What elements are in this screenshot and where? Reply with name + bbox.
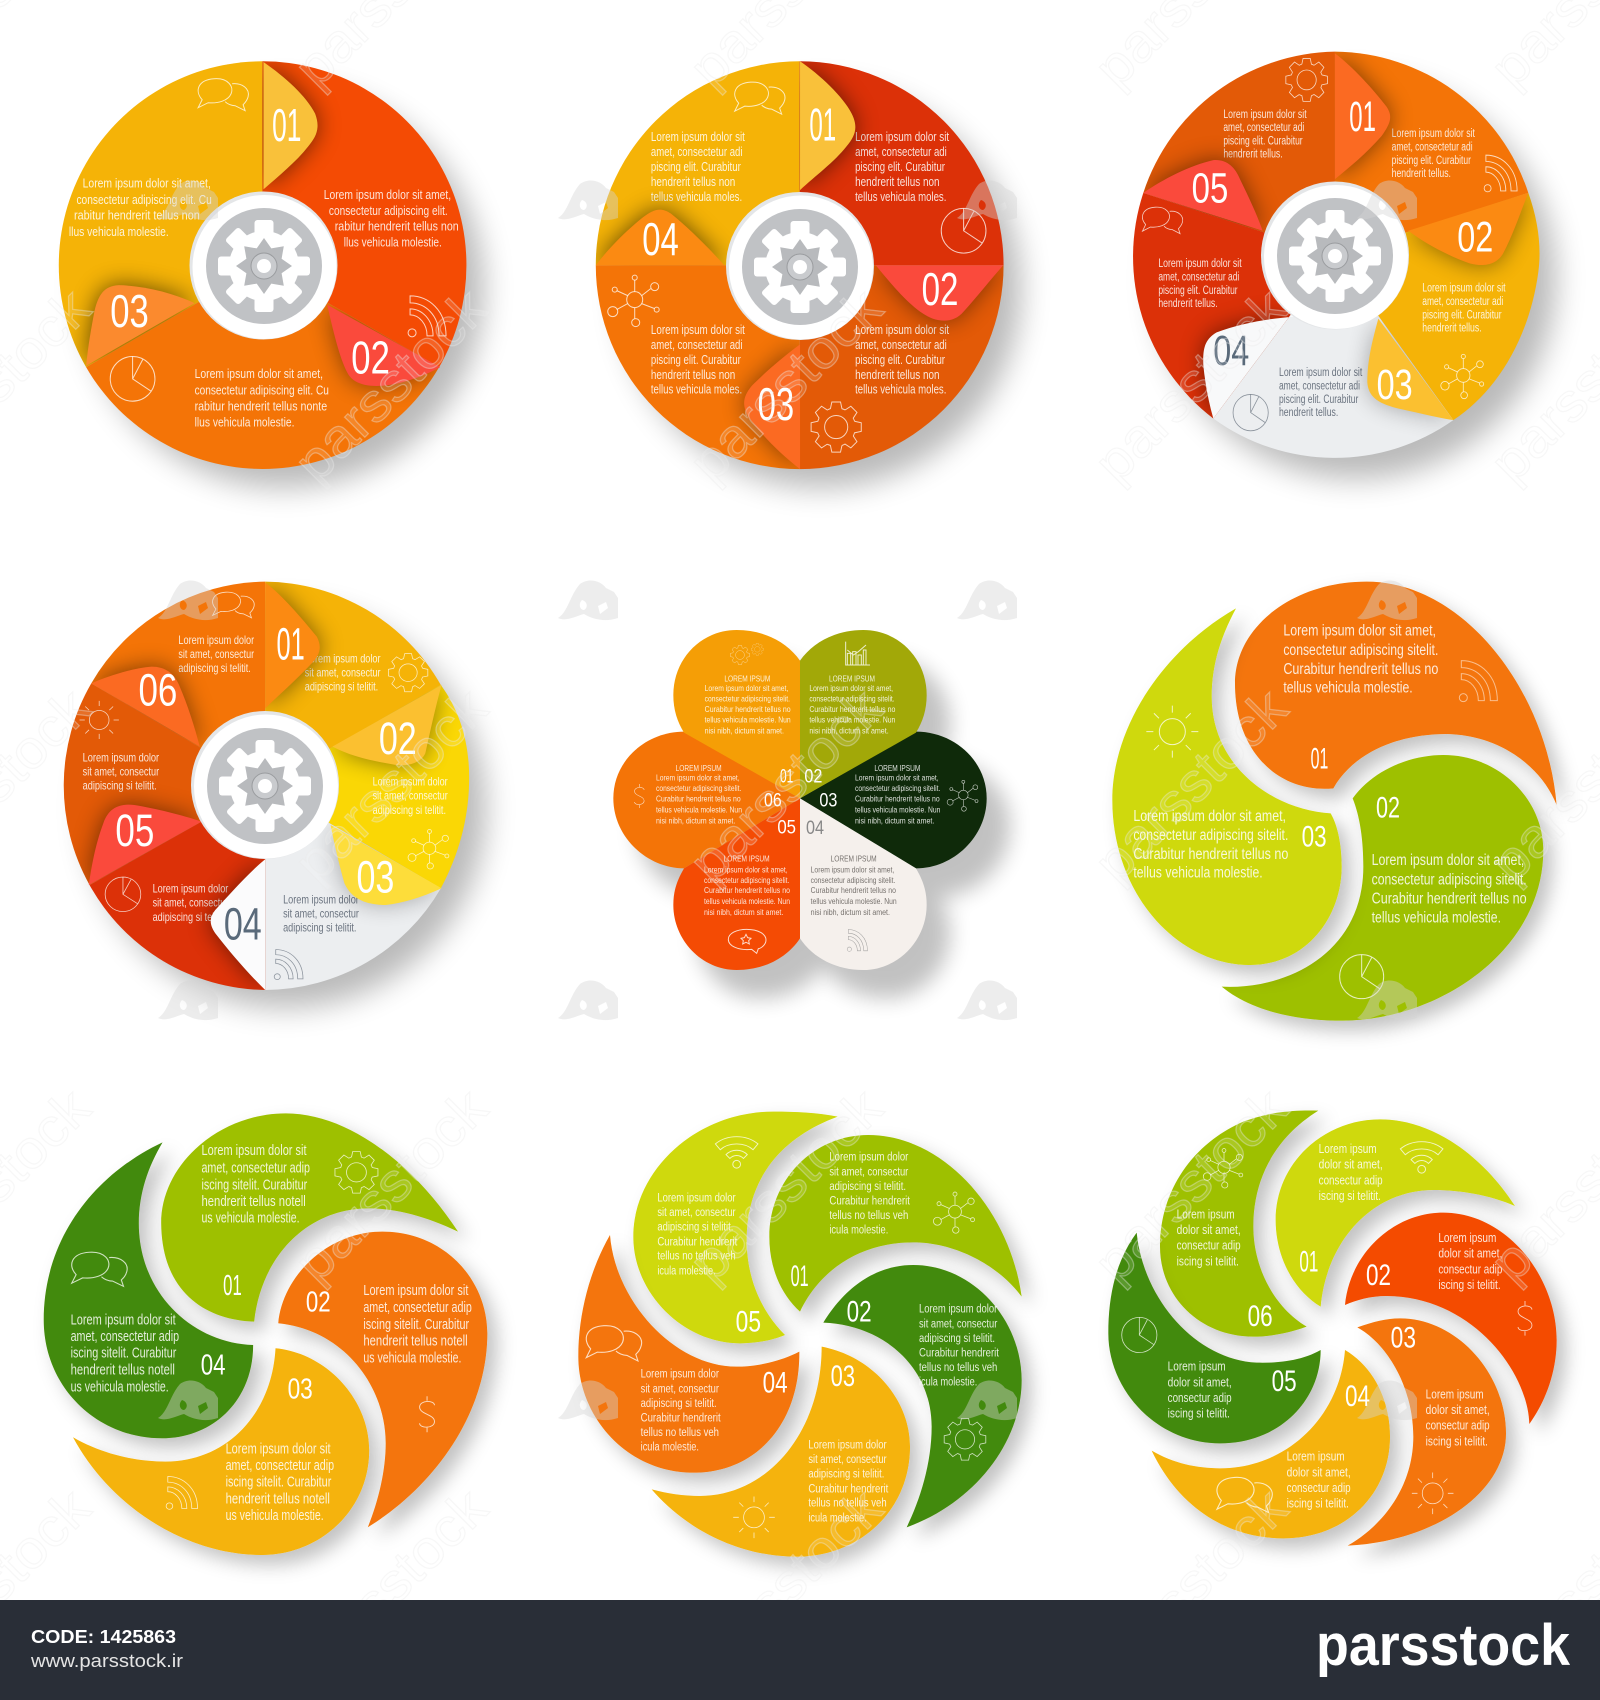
panel: 5-part swirl bbox=[578, 1112, 1022, 1557]
watermark: parsstock text: parsstock bbox=[678, 1077, 894, 1293]
panel: 6-step gear circle: 04 bbox=[224, 899, 262, 949]
panel: six-petal flower: Lorem ipsum dolor sit amet, bbox=[809, 683, 893, 693]
panel: 5-part swirl: adipiscing si telitit. bbox=[919, 1331, 995, 1345]
panel: 4-part swirl: amet, consectetur adip bbox=[226, 1458, 334, 1474]
panel: 5-step gear circle: 05 bbox=[1192, 164, 1228, 212]
panel: 4-part swirl: amet, consectetur adip bbox=[71, 1329, 179, 1345]
panel: 4-step gear circle: Lorem ipsum dolor sit bbox=[651, 129, 745, 144]
panel: 6-step gear circle: Lorem ipsum dolor bbox=[178, 633, 254, 647]
panel: 5-step gear circle: Lorem ipsum dolor sit bbox=[1422, 283, 1506, 295]
panel: 3-step gear circle: 02 bbox=[351, 332, 390, 384]
panel: 4-step gear circle: piscing elit. Curabitur bbox=[855, 352, 945, 367]
panel: 3-part green swirl: 03 bbox=[1302, 821, 1327, 854]
panel: 5-step gear circle: piscing elit. Curabitur bbox=[1223, 136, 1303, 148]
panel: 4-part swirl: iscing sitelit. Curabitur bbox=[226, 1475, 331, 1491]
panel: 4-part swirl: 04 bbox=[201, 1350, 226, 1381]
panel: 4-step gear circle: tellus vehicula moles. bbox=[651, 382, 742, 397]
panel: 5-part swirl: tellus no tellus veh bbox=[641, 1425, 719, 1439]
watermark: parsstock text: parsstock bbox=[678, 677, 894, 893]
panel: 5-part swirl: Curabitur hendrerit bbox=[808, 1481, 889, 1495]
panel: six-petal flower: Curabitur hendrerit tellus no bbox=[704, 885, 790, 895]
panel: 6-step gear circle: adipiscing si telitit. bbox=[305, 679, 378, 693]
panel: 5-part swirl: sit amet, consectur bbox=[808, 1452, 887, 1466]
panel: 4-step gear circle: amet, consectetur adi bbox=[855, 144, 947, 159]
panel: six-petal flower: nisi nibh, dictum sit amet. bbox=[809, 726, 889, 736]
panel: 4-step gear circle: Lorem ipsum dolor sit bbox=[651, 322, 745, 337]
panel: six-petal flower: tellus vehicula molestie. Nun bbox=[704, 896, 790, 906]
panel: 5-part swirl: icula molestie. bbox=[641, 1440, 699, 1454]
panel: 6-part swirl: Lorem ipsum bbox=[1438, 1230, 1496, 1245]
panel: 3-part green swirl: Lorem ipsum dolor sit amet, bbox=[1372, 852, 1524, 869]
panel: six-petal flower: 05 bbox=[777, 817, 796, 838]
watermark: parsstock text: parsstock bbox=[1083, 1077, 1299, 1293]
panel: 3-step gear circle: llus vehicula molestie. bbox=[344, 235, 442, 250]
panel: 5-step gear circle: Lorem ipsum dolor sit bbox=[1279, 367, 1363, 379]
panel: 6-part swirl: iscing si telitit. bbox=[1438, 1277, 1501, 1292]
watermark: parsstock text: parsstock bbox=[1083, 1477, 1299, 1693]
panel: 6-part swirl: 03 bbox=[1391, 1322, 1416, 1355]
panel: six-petal flower: LOREM IPSUM bbox=[831, 854, 877, 864]
panel: 6-part swirl: iscing si telitit. bbox=[1177, 1253, 1239, 1268]
panel: six-petal flower: Lorem ipsum dolor sit amet, bbox=[656, 773, 740, 783]
panel: 4-part swirl: us vehicula molestie. bbox=[363, 1351, 461, 1366]
panel: 5-step gear circle: amet, consectetur adi bbox=[1422, 296, 1503, 308]
panel: 5-part swirl: 05 bbox=[736, 1306, 761, 1339]
panel: 5-part swirl: Curabitur hendrerit bbox=[919, 1346, 999, 1360]
panel: 3-part green swirl: Curabitur hendrerit tellus no bbox=[1133, 846, 1288, 863]
panel: 6-step gear circle: Lorem ipsum dolor bbox=[283, 892, 359, 906]
panel: 5-step gear circle: 04 bbox=[1213, 326, 1249, 374]
panel: 6-step gear circle: Lorem ipsum dolor bbox=[305, 652, 381, 666]
panel: 3-step gear circle: rabitur hendrerit tellus nonte bbox=[195, 399, 327, 414]
panel: 4-part swirl: us vehicula molestie. bbox=[71, 1380, 169, 1395]
panel: 5-part swirl: Lorem ipsum dolor bbox=[829, 1150, 908, 1164]
panel: six-petal flower: 06 bbox=[764, 791, 782, 812]
panel: 3-part green swirl: tellus vehicula molestie. bbox=[1283, 680, 1413, 697]
panel: 5-part swirl: sit amet, consectur bbox=[829, 1164, 908, 1178]
panel: 5-step gear circle: piscing elit. Curabitur bbox=[1392, 155, 1471, 167]
panel: 3-part green swirl: 01 bbox=[1311, 742, 1328, 775]
panel: 4-part swirl: hendrerit tellus notell bbox=[226, 1491, 330, 1507]
panel: 4-step gear circle: hendrerit tellus non bbox=[651, 174, 735, 189]
panel: 5-part swirl: 02 bbox=[847, 1296, 872, 1329]
footer bar bbox=[0, 1600, 1600, 1700]
panel: six-petal flower: nisi nibh, dictum sit amet. bbox=[704, 907, 783, 917]
panel: 3-part green swirl: 02 bbox=[1376, 791, 1400, 824]
panel: six-petal flower: Lorem ipsum dolor sit amet, bbox=[705, 683, 788, 693]
panel: 3-step gear circle: Lorem ipsum dolor sit amet, bbox=[324, 187, 451, 202]
watermark: parsstock text: parsstock bbox=[283, 1477, 499, 1693]
panel: 5-part swirl: tellus no tellus veh bbox=[919, 1360, 997, 1374]
panel: 5-step gear circle: amet, consectetur adi bbox=[1392, 141, 1473, 154]
panel: 6-step gear circle: Lorem ipsum dolor bbox=[373, 775, 448, 789]
panel: 4-part swirl: amet, consectetur adip bbox=[201, 1161, 310, 1176]
panel: 6-part swirl: dolor sit amet, bbox=[1168, 1374, 1232, 1389]
panel: 3-step gear circle: 01 bbox=[272, 99, 301, 151]
panel: 6-part swirl: consectur adip bbox=[1287, 1480, 1351, 1495]
panel: 5-part swirl: Lorem ipsum dolor bbox=[808, 1437, 887, 1451]
panel: six-petal flower: LOREM IPSUM bbox=[676, 763, 722, 773]
footer code: CODE: 1425863 bbox=[31, 1627, 176, 1647]
panel: 4-part swirl: us vehicula molestie. bbox=[226, 1508, 324, 1524]
panel: 5-part swirl: Lorem ipsum dolor bbox=[919, 1302, 997, 1316]
panel: six-petal flower: Curabitur hendrerit tellus no bbox=[855, 793, 940, 803]
panel: 5-part swirl: tellus no tellus veh bbox=[829, 1208, 908, 1222]
panel: 5-step gear circle: amet, consectetur adi bbox=[1223, 122, 1304, 134]
panel: 4-step gear circle: Lorem ipsum dolor sit bbox=[855, 322, 949, 337]
panel: 5-part swirl: icula molestie. bbox=[919, 1375, 977, 1389]
panel: six-petal flower: consectetur adipiscing sitelit. bbox=[855, 783, 940, 793]
panel: 4-step gear circle: Lorem ipsum dolor sit bbox=[855, 129, 949, 144]
panel: 4-step gear circle: tellus vehicula moles. bbox=[651, 189, 742, 204]
panel: 6-step gear circle: 06 bbox=[138, 665, 177, 715]
panel: 3-step gear circle: rabitur hendrerit tellus non bbox=[335, 219, 459, 234]
panel: 4-part swirl: iscing sitelit. Curabitur bbox=[363, 1317, 469, 1333]
panel: 6-step gear circle: 05 bbox=[115, 806, 154, 856]
panel: 6-part swirl: Lorem ipsum bbox=[1426, 1386, 1484, 1401]
panel: 4-step gear circle: tellus vehicula moles. bbox=[855, 382, 946, 397]
panel: 6-part swirl: dolor sit amet, bbox=[1319, 1157, 1383, 1172]
panel: six-petal flower: tellus vehicula molestie. Nun bbox=[809, 715, 896, 725]
panel: 6-part swirl: iscing si telitit. bbox=[1168, 1406, 1230, 1421]
panel: 4-step gear circle: piscing elit. Curabitur bbox=[651, 159, 741, 174]
panel: 6-part swirl: consectur adip bbox=[1319, 1172, 1383, 1187]
footer logo: parsstock bbox=[1316, 1613, 1571, 1678]
panel: 3-step gear circle: llus vehicula molestie. bbox=[69, 224, 169, 239]
panel: six-petal flower: nisi nibh, dictum sit amet. bbox=[656, 815, 735, 825]
panel: six-petal flower: nisi nibh, dictum sit amet. bbox=[811, 907, 890, 917]
panel: six-petal flower: consectetur adipiscing sitelit. bbox=[704, 875, 789, 885]
panel: 5-part swirl: 03 bbox=[831, 1360, 855, 1393]
panel: 5-step gear circle: amet, consectetur adi bbox=[1158, 271, 1239, 283]
panel: 6-part swirl: iscing si telitit. bbox=[1426, 1433, 1488, 1448]
panel: 6-step gear circle: adipiscing si telitit. bbox=[83, 778, 157, 792]
panel: six-petal flower: 03 bbox=[819, 791, 837, 812]
panel: 3-part green swirl: consectetur adipiscing sitelit. bbox=[1283, 642, 1438, 659]
panel: 6-step gear circle: adipiscing si telitit. bbox=[153, 910, 226, 924]
panel: six-petal flower: tellus vehicula molestie. Nun bbox=[811, 896, 897, 906]
panel: 6-step gear circle: 03 bbox=[356, 852, 394, 902]
panel: 3-step gear circle: consectetur adipiscing elit. bbox=[329, 203, 448, 218]
panel: six-petal flower: consectetur adipiscing sitelit. bbox=[705, 694, 790, 704]
panel: 3-part green swirl: Curabitur hendrerit tellus no bbox=[1283, 661, 1438, 678]
panel: 4-part swirl: Lorem ipsum dolor sit bbox=[363, 1283, 468, 1299]
panel: 6-part swirl: Lorem ipsum bbox=[1319, 1141, 1377, 1156]
panel: 5-step gear circle: 01 bbox=[1349, 92, 1376, 140]
panel: 5-step gear circle: hendrerit tellus. bbox=[1158, 298, 1218, 310]
panel: 5-part swirl: tellus no tellus veh bbox=[808, 1496, 887, 1510]
panel: 6-part swirl: 04 bbox=[1345, 1380, 1370, 1413]
panel: 4-part swirl bbox=[44, 1113, 487, 1555]
panel: six-petal flower: Curabitur hendrerit tellus no bbox=[811, 885, 896, 895]
panel: 5-part swirl: Curabitur hendrerit bbox=[641, 1411, 721, 1425]
panel: 4-step gear circle: piscing elit. Curabitur bbox=[651, 352, 741, 367]
watermark: parsstock text: parsstock bbox=[283, 277, 499, 493]
panel: 6-part swirl: dolor sit amet, bbox=[1287, 1464, 1351, 1479]
panel: 5-step gear circle: hendrerit tellus. bbox=[1392, 168, 1451, 180]
panel: 4-part swirl: iscing sitelit. Curabitur bbox=[71, 1346, 176, 1362]
panel: 4-part swirl: hendrerit tellus notell bbox=[201, 1194, 306, 1210]
panel: 5-part swirl: Lorem ipsum dolor bbox=[657, 1190, 736, 1204]
panel: 5-step gear circle: hendrerit tellus. bbox=[1223, 149, 1283, 161]
panel: 5-part swirl: Curabitur hendrerit bbox=[657, 1234, 738, 1248]
panel: 6-step gear circle: sit amet, consectur bbox=[305, 666, 381, 679]
panel: six-petal flower: Curabitur hendrerit tellus no bbox=[809, 704, 896, 714]
watermark: parsstock text: parsstock bbox=[1083, 277, 1299, 493]
panel: six-petal flower: nisi nibh, dictum sit amet. bbox=[705, 726, 784, 736]
panel: 5-part swirl: Lorem ipsum dolor bbox=[641, 1367, 719, 1381]
panel: 6-part swirl: 01 bbox=[1299, 1246, 1318, 1279]
panel: 4-part swirl: 02 bbox=[306, 1287, 331, 1319]
panel: six-petal flower: LOREM IPSUM bbox=[724, 674, 770, 684]
panel: 5-step gear circle bbox=[1133, 52, 1556, 479]
panel: 5-part swirl: adipiscing si telitit. bbox=[657, 1220, 733, 1234]
panel: 4-part swirl: 01 bbox=[223, 1270, 242, 1302]
panel: 3-step gear circle: Lorem ipsum dolor sit amet, bbox=[195, 366, 323, 381]
panel: 6-part swirl: Lorem ipsum bbox=[1177, 1206, 1235, 1221]
panel: six-petal flower: Lorem ipsum dolor sit amet, bbox=[855, 773, 939, 783]
panel: six-petal flower: tellus vehicula molestie. Nun bbox=[656, 805, 742, 815]
panel: 6-step gear circle: sit amet, consectur bbox=[153, 896, 228, 910]
panel: 6-part swirl: iscing si telitit. bbox=[1287, 1496, 1349, 1511]
panel: 6-part swirl: consectur adip bbox=[1168, 1390, 1232, 1405]
panel: 4-step gear circle: 04 bbox=[642, 213, 679, 265]
panel: six-petal flower: consectetur adipiscing sitelit. bbox=[809, 694, 895, 704]
panel: 4-part swirl: Lorem ipsum dolor sit bbox=[226, 1441, 331, 1457]
panel: 5-part swirl: sit amet, consectur bbox=[919, 1316, 997, 1330]
watermark: parsstock text: parsstock bbox=[283, 677, 499, 893]
panel: 4-part swirl: amet, consectetur adip bbox=[363, 1300, 472, 1316]
panel: 3-part green swirl: Lorem ipsum dolor sit amet, bbox=[1283, 623, 1436, 640]
panel: 5-step gear circle: piscing elit. Curabitur bbox=[1279, 394, 1358, 406]
panel: 5-step gear circle: Lorem ipsum dolor sit bbox=[1223, 109, 1307, 121]
panel: six-petal flower: 04 bbox=[806, 818, 824, 839]
panel: 3-part green swirl bbox=[1112, 582, 1557, 1021]
panel: six-petal flower: tellus vehicula molestie. Nun bbox=[705, 715, 791, 725]
panel: 4-part swirl: iscing sitelit. Curabitur bbox=[201, 1178, 307, 1193]
panel: 6-part swirl: Lorem ipsum bbox=[1168, 1359, 1226, 1374]
panel: 6-step gear circle: adipiscing si telitit. bbox=[373, 803, 446, 817]
panel: 3-step gear circle bbox=[59, 61, 484, 488]
panel: 5-part swirl: adipiscing si telitit. bbox=[641, 1396, 717, 1410]
panel: 6-step gear circle: adipiscing si telitit. bbox=[178, 661, 251, 675]
panel: 6-step gear circle: sit amet, consectur bbox=[83, 764, 159, 778]
panel: 3-step gear circle: consectetur adipiscing elit. Cu bbox=[76, 192, 212, 207]
panel: 4-part swirl: hendrerit tellus notell bbox=[71, 1363, 175, 1379]
panel: 4-step gear circle: amet, consectetur adi bbox=[651, 337, 743, 352]
panel: 4-step gear circle: hendrerit tellus non bbox=[855, 367, 940, 382]
panel: six-petal flower: Curabitur hendrerit tellus no bbox=[656, 793, 741, 803]
panel: 6-part swirl bbox=[1108, 1111, 1557, 1546]
panel: 3-step gear circle: rabitur hendrerit tellus non bbox=[74, 208, 200, 223]
panel: 4-step gear circle: 03 bbox=[758, 378, 794, 430]
panel: six-petal flower: LOREM IPSUM bbox=[829, 674, 875, 684]
panel: six-petal flower: nisi nibh, dictum sit amet. bbox=[855, 815, 934, 825]
panel: 3-step gear circle: 03 bbox=[110, 285, 149, 337]
panel: 5-step gear circle: hendrerit tellus. bbox=[1422, 323, 1482, 335]
panel: six-petal flower: 01 bbox=[780, 767, 793, 788]
panel: six-petal flower: Curabitur hendrerit tellus no bbox=[705, 704, 791, 714]
panel: 3-part green swirl: consectetur adipiscing sitelit. bbox=[1372, 871, 1527, 888]
panel: 6-step gear circle: adipiscing si telitit. bbox=[283, 921, 356, 935]
panel: 4-step gear circle: amet, consectetur adi bbox=[855, 337, 947, 352]
panel: 5-step gear circle: Lorem ipsum dolor sit bbox=[1158, 258, 1242, 270]
panel: 4-step gear circle: piscing elit. Curabitur bbox=[855, 159, 945, 174]
panel: 6-step gear circle: 01 bbox=[277, 619, 305, 669]
panel: 3-step gear circle: Lorem ipsum dolor sit amet, bbox=[83, 176, 211, 191]
panel: 5-part swirl: 04 bbox=[763, 1367, 788, 1400]
panel: 5-part swirl: adipiscing si telitit. bbox=[808, 1467, 884, 1481]
panel: 5-step gear circle: Lorem ipsum dolor sit bbox=[1392, 128, 1476, 140]
watermark: parsstock text: parsstock bbox=[678, 277, 894, 493]
panel: 4-step gear circle: hendrerit tellus non bbox=[651, 367, 735, 382]
panel: 6-step gear circle: sit amet, consectur bbox=[283, 906, 359, 920]
panel: six-petal flower: LOREM IPSUM bbox=[724, 854, 770, 864]
panel: six-petal flower: tellus vehicula molestie. Nun bbox=[855, 805, 941, 815]
panel: 6-step gear circle: Lorem ipsum dolor bbox=[153, 882, 228, 896]
panel: 3-part green swirl: tellus vehicula molestie. bbox=[1133, 864, 1263, 881]
panel: 6-part swirl: Lorem ipsum bbox=[1287, 1449, 1345, 1464]
panel: 6-part swirl: consectur adip bbox=[1177, 1238, 1241, 1253]
panel: 5-step gear circle: hendrerit tellus. bbox=[1279, 407, 1338, 419]
panel: 5-part swirl: icula molestie. bbox=[657, 1263, 716, 1277]
panel: 6-step gear circle: Lorem ipsum dolor bbox=[83, 750, 159, 764]
panel: six-petal flower: consectetur adipiscing sitelit. bbox=[656, 783, 741, 793]
panel: 6-part swirl: 05 bbox=[1272, 1365, 1297, 1398]
panel: six-petal flower: Lorem ipsum dolor sit amet, bbox=[811, 864, 894, 874]
panel: 3-step gear circle: llus vehicula molestie. bbox=[195, 414, 294, 429]
panel: 4-part swirl: hendrerit tellus notell bbox=[363, 1334, 468, 1350]
panel: 6-step gear circle bbox=[64, 582, 486, 1008]
panel: 5-part swirl: 01 bbox=[791, 1260, 809, 1293]
panel: six-petal flower: LOREM IPSUM bbox=[874, 763, 920, 773]
panel: 5-part swirl: tellus no tellus veh bbox=[657, 1249, 736, 1263]
panel: 6-part swirl: iscing si telitit. bbox=[1319, 1188, 1381, 1203]
panel: 3-part green swirl: Curabitur hendrerit tellus no bbox=[1372, 890, 1527, 907]
panel: six-petal flower: Lorem ipsum dolor sit amet, bbox=[704, 864, 788, 874]
flower shadow bbox=[637, 658, 1010, 998]
panel: 6-part swirl: consectur adip bbox=[1426, 1418, 1490, 1433]
watermark: parsstock text: parsstock bbox=[1083, 677, 1299, 893]
panel: 6-part swirl: dolor sit amet, bbox=[1438, 1246, 1502, 1261]
panel: 4-step gear circle: 01 bbox=[809, 99, 836, 151]
panel: 5-part swirl: Curabitur hendrerit bbox=[829, 1194, 910, 1208]
panel: 6-step gear circle: sit amet, consectur bbox=[373, 789, 448, 803]
panel: 4-step gear circle: amet, consectetur adi bbox=[651, 144, 743, 159]
panel: 6-part swirl: 06 bbox=[1248, 1300, 1273, 1333]
panel: 6-part swirl: 02 bbox=[1366, 1259, 1391, 1292]
panel: 5-part swirl: icula molestie. bbox=[808, 1510, 867, 1524]
panel: 3-part green swirl: Lorem ipsum dolor sit amet, bbox=[1133, 808, 1286, 825]
panel: 3-step gear circle: consectetur adipiscing elit. Cu bbox=[195, 382, 329, 397]
panel: 5-step gear circle: piscing elit. Curabitur bbox=[1158, 285, 1238, 297]
panel: 5-part swirl: sit amet, consectur bbox=[657, 1205, 736, 1219]
panel: 6-part swirl: dolor sit amet, bbox=[1177, 1222, 1241, 1237]
panel: 4-part swirl: Lorem ipsum dolor sit bbox=[71, 1313, 176, 1328]
panel: six-petal flower bbox=[613, 630, 1010, 998]
panel: 5-part swirl: sit amet, consectur bbox=[641, 1381, 719, 1395]
panel: 4-step gear circle: hendrerit tellus non bbox=[855, 174, 940, 189]
panel: 3-part green swirl: tellus vehicula molestie. bbox=[1372, 909, 1501, 926]
panel: 3-part green swirl: consectetur adipiscing sitelit. bbox=[1133, 827, 1288, 844]
panel: 5-step gear circle: 03 bbox=[1377, 360, 1413, 408]
watermark: parsstock text: parsstock bbox=[678, 1477, 894, 1693]
panel: 6-part swirl: dolor sit amet, bbox=[1426, 1402, 1490, 1417]
panel: 6-step gear circle: 02 bbox=[379, 714, 417, 764]
panel: 4-step gear circle bbox=[596, 61, 1021, 488]
panel: six-petal flower: consectetur adipiscing sitelit. bbox=[811, 875, 895, 885]
panel: 4-part swirl: us vehicula molestie. bbox=[201, 1211, 300, 1227]
panel: 6-part swirl: consectur adip bbox=[1438, 1261, 1502, 1276]
watermark: parsstock text: parsstock bbox=[283, 1077, 499, 1293]
panel: 5-step gear circle: 02 bbox=[1457, 213, 1493, 261]
panel: 5-part swirl: adipiscing si telitit. bbox=[829, 1179, 906, 1193]
panel: 4-part swirl: Lorem ipsum dolor sit bbox=[201, 1143, 307, 1159]
panel: 4-step gear circle: 02 bbox=[922, 263, 958, 315]
panel: 4-step gear circle: tellus vehicula moles. bbox=[855, 189, 946, 204]
footer url: www.parsstock.ir bbox=[30, 1651, 183, 1671]
panel: six-petal flower: 02 bbox=[804, 767, 822, 788]
panel: 6-step gear circle: sit amet, consectur bbox=[178, 647, 254, 661]
panel: 5-step gear circle: amet, consectetur adi bbox=[1279, 380, 1360, 393]
watermark: elephant marks bbox=[158, 181, 1417, 1420]
panel: 5-step gear circle: piscing elit. Curabitur bbox=[1422, 309, 1502, 322]
panel: 5-part swirl: icula molestie. bbox=[829, 1223, 888, 1237]
panel: 4-part swirl: 03 bbox=[288, 1374, 313, 1405]
